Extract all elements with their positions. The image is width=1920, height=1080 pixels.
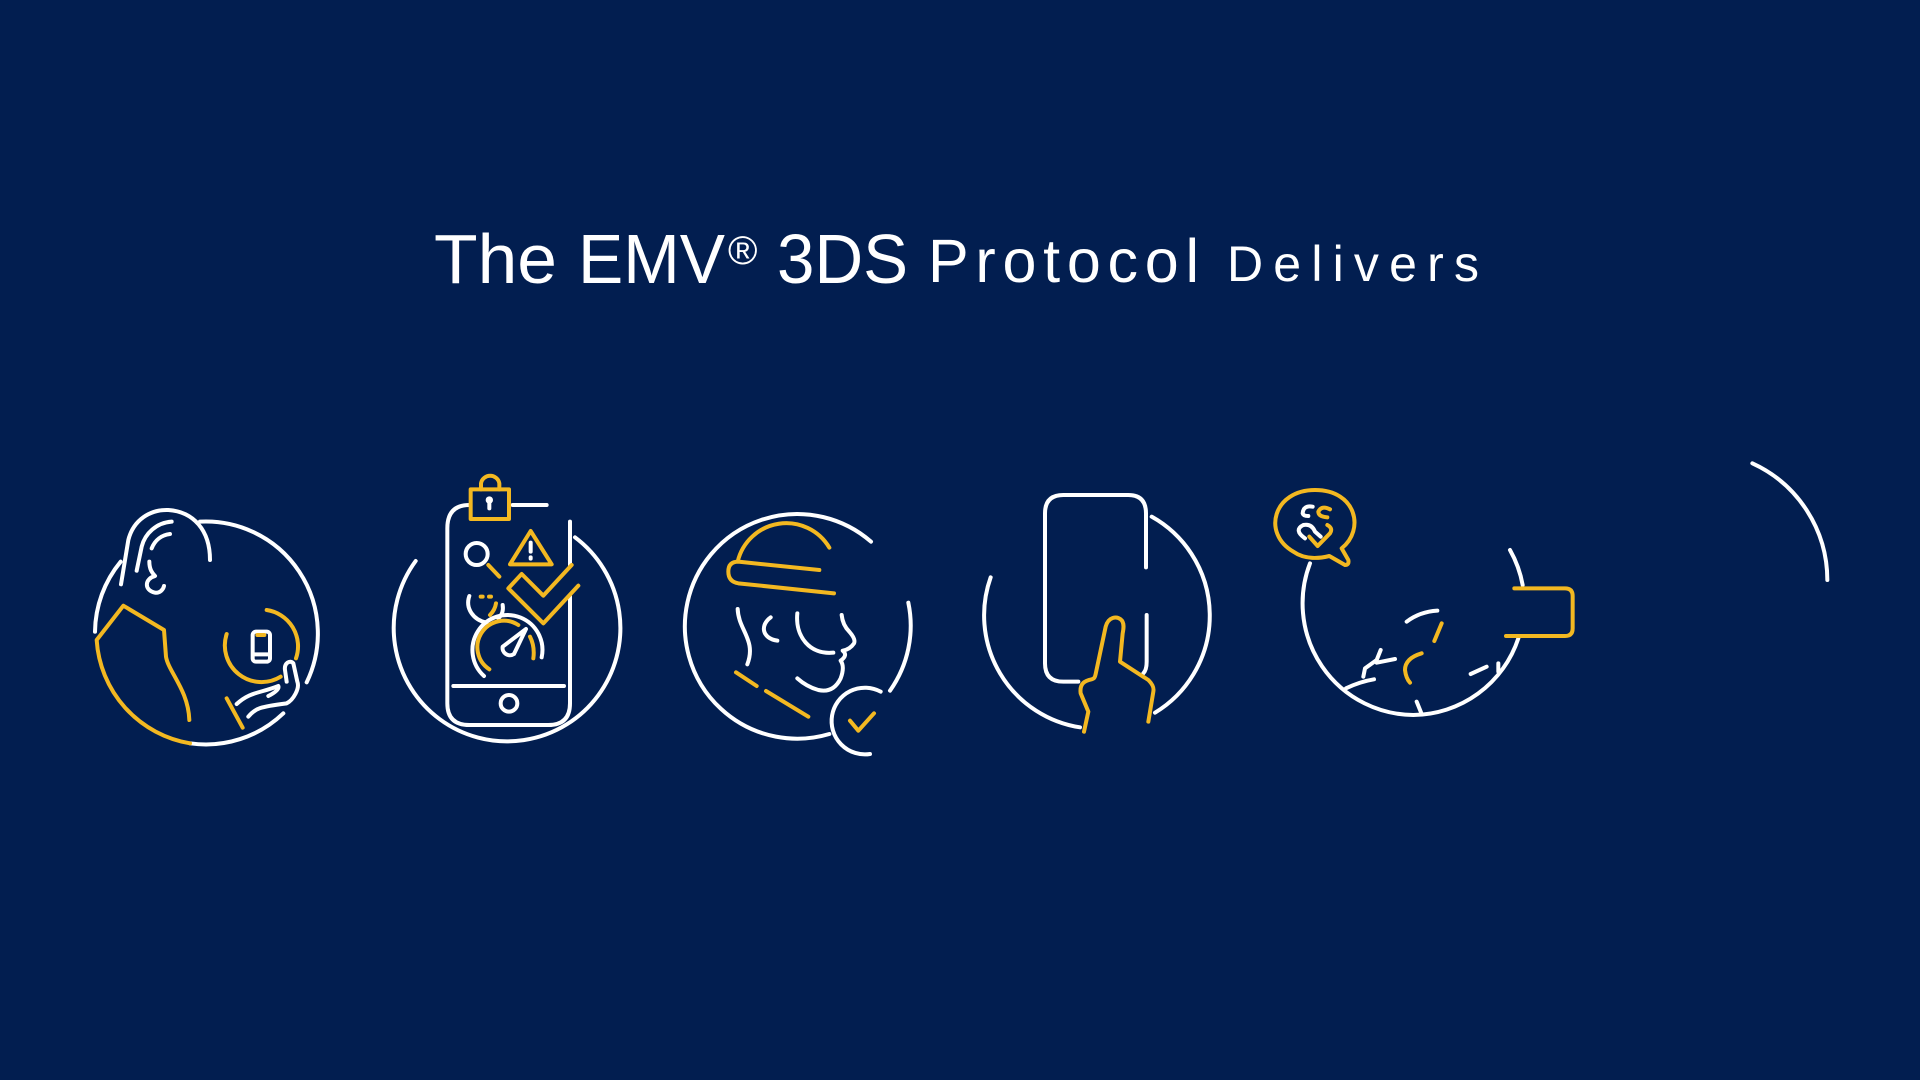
title: EMV (578, 220, 725, 298)
title: 3DS (777, 220, 908, 298)
icon: profile with hat and check (685, 514, 911, 754)
title: The (434, 220, 557, 298)
icon: speech bubble with partial circle (1275, 490, 1573, 715)
icon: person holding phone (95, 510, 318, 744)
icon: phone with security checks (394, 476, 620, 741)
title: ® (728, 229, 757, 273)
icon: finger tapping phone (984, 495, 1210, 732)
title: Protocol (928, 227, 1199, 295)
title (434, 220, 1479, 298)
title: Delivers (1227, 236, 1479, 292)
icon: partial arc (1752, 463, 1827, 580)
